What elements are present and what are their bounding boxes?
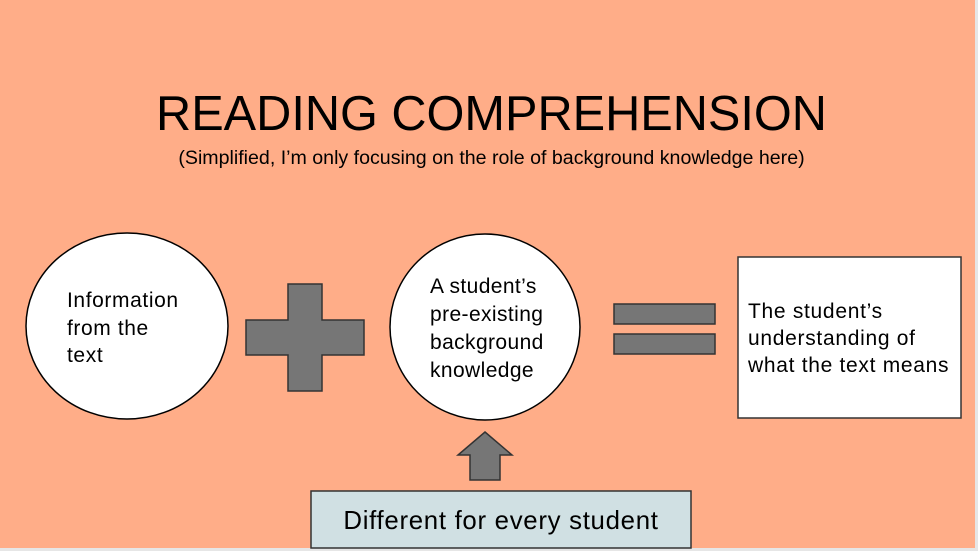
subtitle: (Simplified, I’m only focusing on the role of background knowledge here) (178, 147, 805, 169)
circle: background knowledge (390, 234, 580, 420)
circle: background knowledge: A student’s (430, 275, 537, 298)
box: student's understanding (738, 257, 961, 418)
circle: information from the text: Information (67, 289, 179, 312)
box: different for every student: Different for every student (343, 507, 659, 535)
box: different for every student (311, 491, 691, 548)
icon: equals sign (614, 304, 715, 354)
arrow: up (458, 432, 512, 480)
icon: plus sign (246, 284, 364, 391)
title: READING COMPREHENSION (156, 87, 827, 141)
circle: background knowledge: background (430, 331, 544, 354)
circle: background knowledge: knowledge (430, 359, 534, 382)
box: student's understanding: The student’s (748, 300, 883, 323)
box: student's understanding: what the text means (747, 354, 949, 377)
circle: information from the text (26, 233, 228, 419)
circle: information from the text: from the (67, 317, 149, 340)
circle: background knowledge: pre-existing (430, 303, 543, 326)
box: student's understanding: understanding of (748, 327, 916, 350)
circle: information from the text: text (67, 344, 103, 367)
